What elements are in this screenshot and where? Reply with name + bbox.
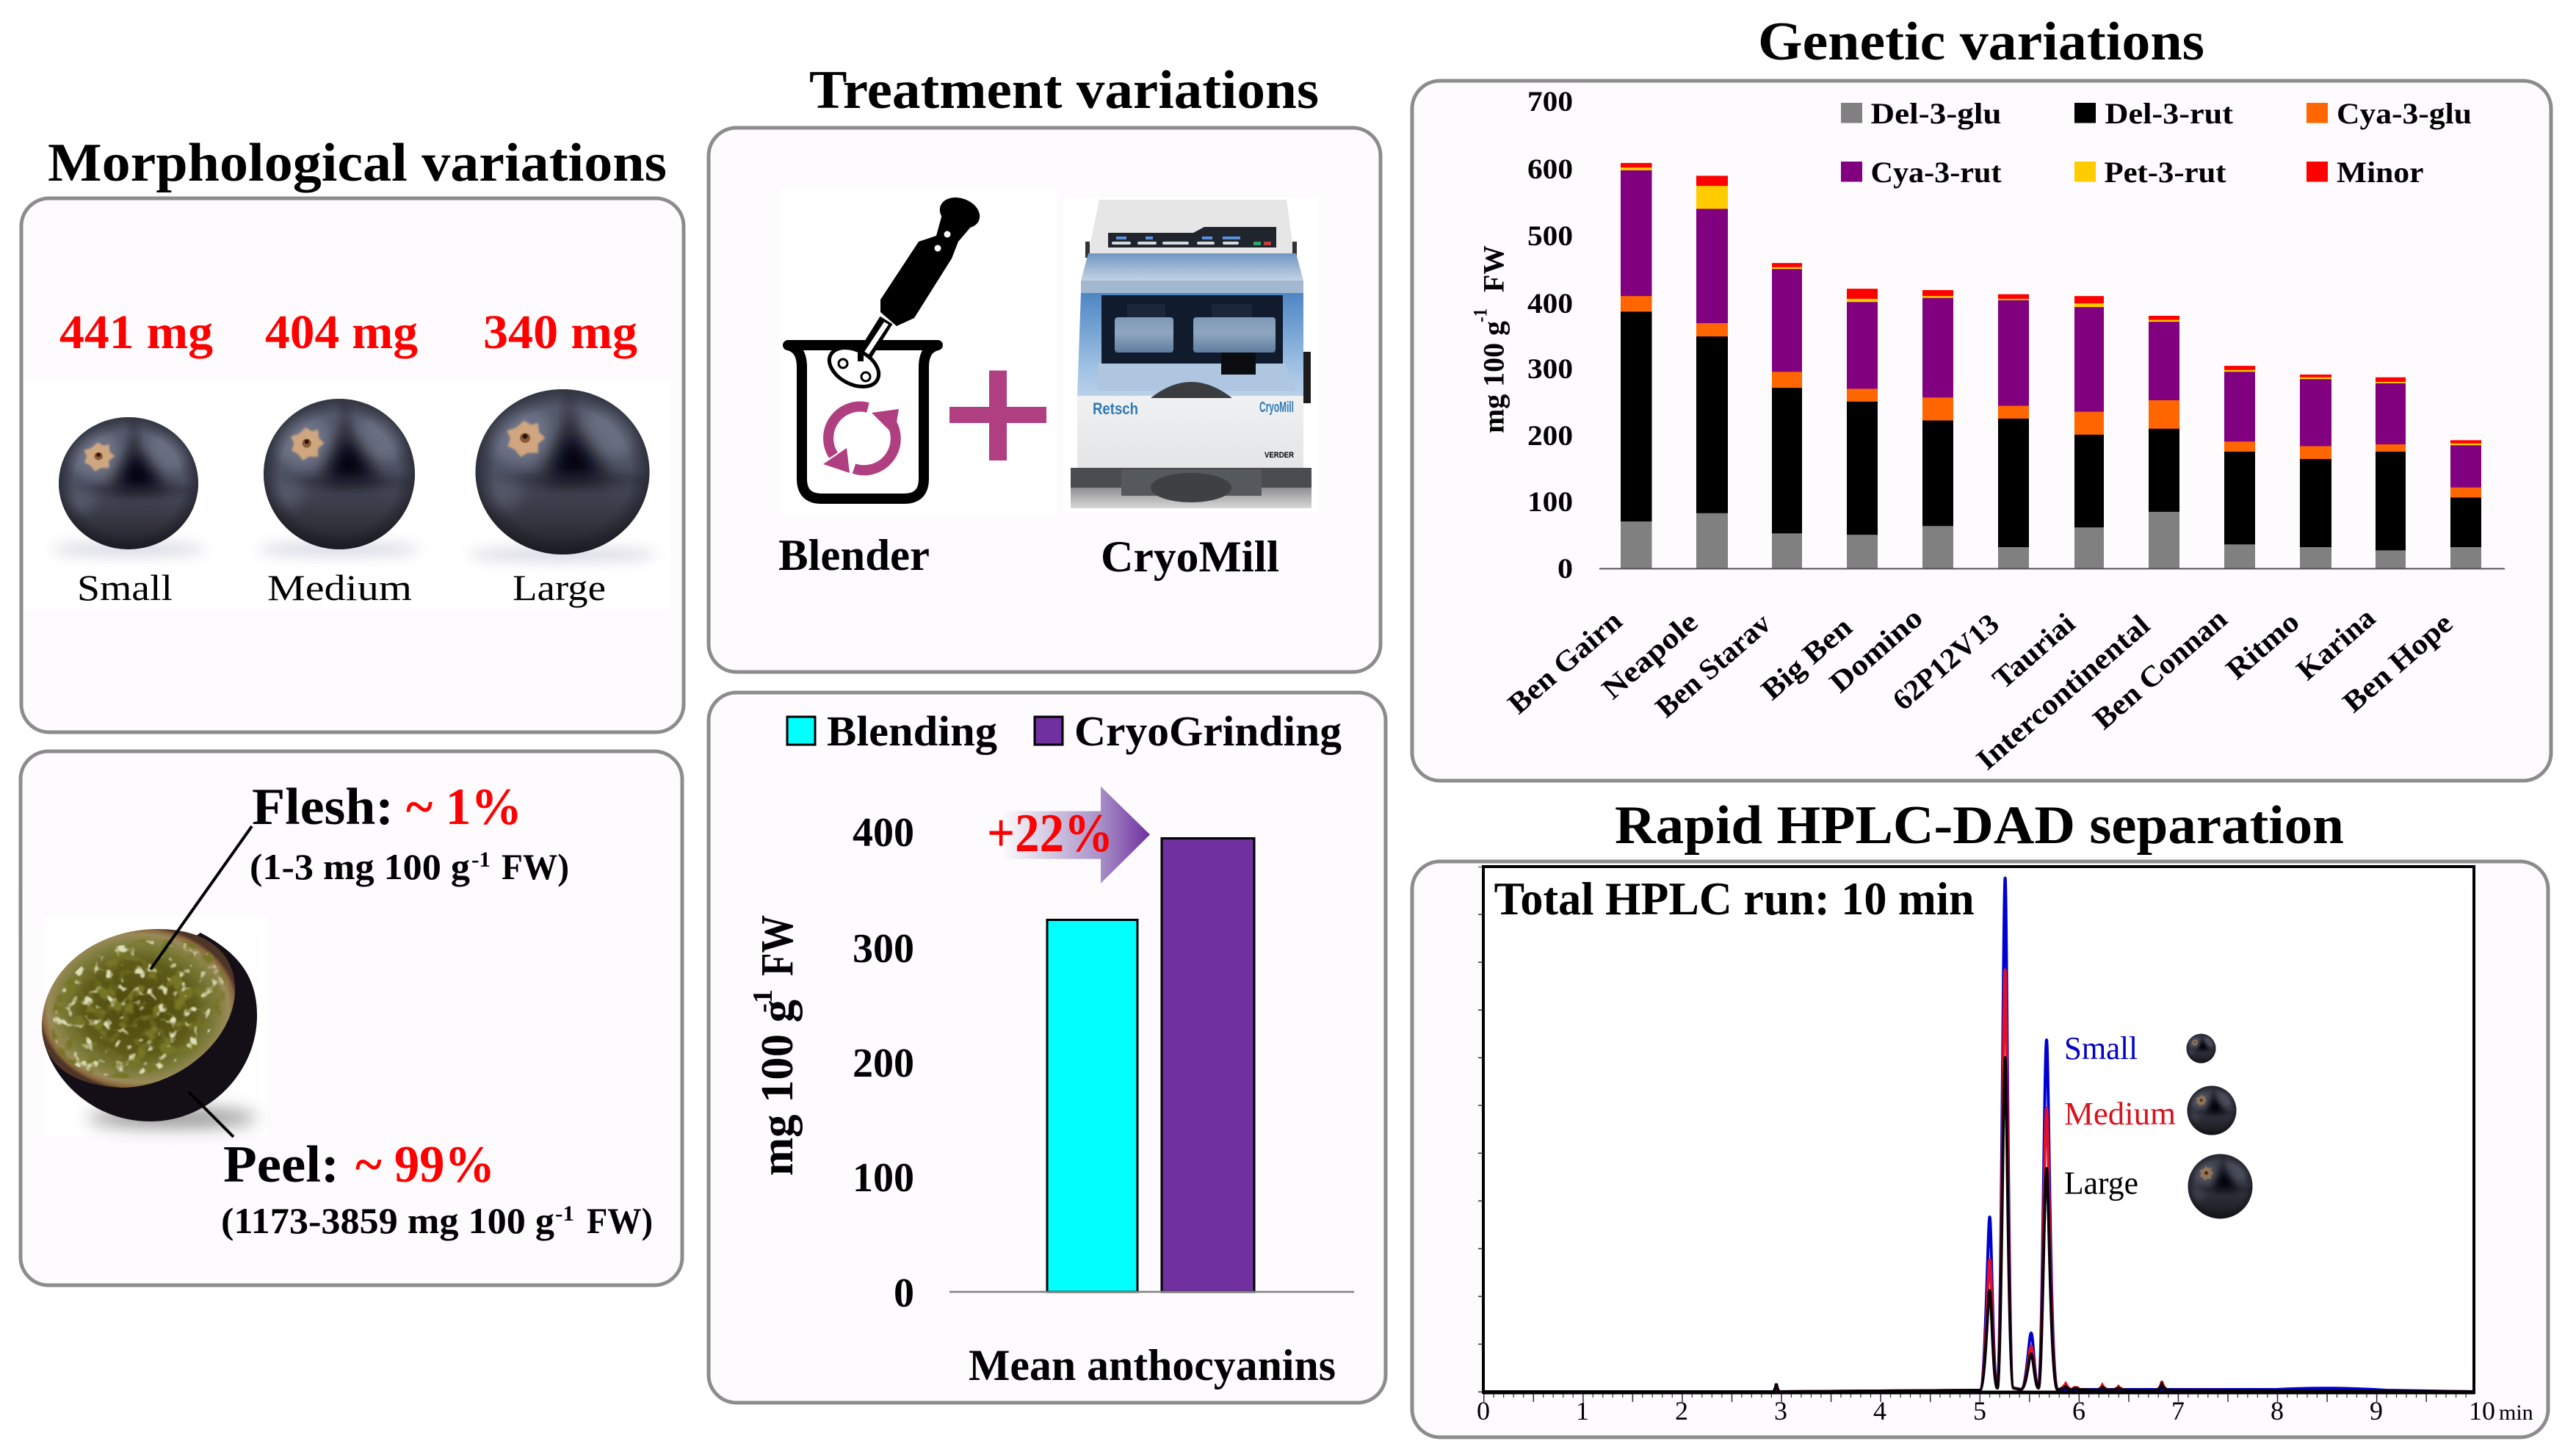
x axis labels [1501,601,2459,776]
icon: halved berry [42,929,257,1127]
x axis labels: 8 [2271,1396,2284,1425]
x axis label: Mean anthocyanins [969,1341,1336,1390]
text: flesh range: FW) [502,846,569,887]
x axis labels: 3 [1774,1396,1787,1425]
icon: small berry [59,417,198,549]
icon: medium berry [264,399,415,549]
label: Verder mark: VERDER [1265,451,1294,460]
heading: genetic variations: Genetic variations [1758,12,2204,72]
y axis title [1470,245,1510,433]
line: flesh pointer [151,826,252,969]
y axis labels: 400 [853,810,914,856]
text: peel range: FW) [587,1200,653,1241]
bar: Domino [1922,290,1953,568]
plot baseline [1483,1391,2475,1394]
x axis labels: 2 [1675,1396,1688,1425]
x axis labels: min [2499,1401,2533,1425]
text: flesh range [250,846,569,887]
label: blender: Blender [778,531,930,579]
legend [1841,97,2472,189]
label: flesh: Flesh: [252,778,394,836]
bar: blending [1047,919,1137,1292]
bar: cryogrinding [1162,839,1254,1292]
bar: Ben Hope [2450,440,2481,568]
icon: blender in beaker [788,192,984,499]
bar: Tauriai [2074,296,2104,568]
panel: berry size [21,198,684,732]
label: small: Small [77,567,173,608]
legend: blending: Blending [827,707,997,755]
legend: small [2064,1030,2216,1066]
plot frame [1483,867,2474,1392]
heading: treatment variations: Treatment variations [809,60,1319,120]
label: peel: Peel: [223,1136,339,1193]
value: +22%: +22% [987,803,1113,864]
panel: mean anthocyanins chart [709,693,1386,1403]
panel: treatment equipment [709,128,1381,672]
y axis labels: 500 [1527,220,1573,252]
y axis labels: 200 [1527,420,1573,452]
x axis labels: Domino [1823,601,1929,699]
x axis labels: Ben Gairn [1501,604,1628,720]
icon: CryoMill machine [1071,200,1311,508]
bar: Ritmo [2300,375,2331,568]
label: CryoMill brand: CryoMill [1259,400,1294,416]
stacked bars [1621,163,2481,568]
icon: plus sign [949,370,1046,460]
value: large berry 340 mg: 340 mg [483,306,637,359]
berry shadows [51,543,656,561]
bar: Karina [2376,377,2406,568]
x axis labels: Big Ben [1754,610,1859,707]
text: flesh range: -1 [471,848,491,872]
panel: cultivar chart [1412,81,2551,781]
label: Retsch brand: Retsch [1093,400,1138,418]
y axis labels [853,810,914,1316]
y axis labels: 0 [1557,553,1573,585]
x axis labels: 5 [1973,1396,1986,1425]
x axis [949,1291,1354,1293]
panel: flesh and peel [21,751,682,1285]
y axis labels: 100 [1527,486,1573,518]
x axis labels: Ritmo [2219,605,2305,686]
text: flesh range: (1-3 mg 100 g [250,846,470,887]
text: peel range: (1173-3859 mg 100 g [221,1200,554,1241]
y axis title: FW [1477,245,1510,292]
x axis labels: 10 [2469,1396,2495,1425]
label: cryomill: CryoMill [1101,532,1279,581]
y axis labels: 200 [853,1041,914,1086]
heading: morphological variations: Morphological variations [48,133,667,193]
label: medium: Medium [267,567,412,608]
legend: large [2064,1154,2253,1218]
label: large: Large [513,567,606,608]
legend: Del-3-rut [2105,97,2234,130]
legend: Cya-3-rut [1871,156,2002,189]
x axis labels [1477,1396,2533,1425]
x axis labels: Karina [2290,601,2381,687]
x axis labels: Neapole [1595,605,1704,706]
trace: large berries [1483,1058,2475,1392]
x axis labels: Ben Hope [2336,606,2459,719]
x axis labels: Tauriai [1986,607,2081,695]
bar: Big Ben [1847,289,1878,568]
y axis labels: 300 [1527,353,1573,385]
y axis title: -1 [1470,308,1491,322]
bar: Ben Connan [2224,366,2255,568]
y axis labels: 600 [1527,153,1573,185]
x axis labels: 1 [1576,1396,1589,1425]
bar: Ben Starav [1772,263,1802,568]
line: peel pointer [189,1092,234,1137]
arrow: increase [999,787,1150,884]
value: peel percent: ~ 99% [355,1136,495,1193]
legend: Minor [2337,156,2423,189]
x axis labels: Ben Connan [2086,602,2233,736]
y axis title: -1 [748,989,778,1013]
text: peel range: -1 [555,1202,574,1226]
trace: small berries [1483,878,2475,1392]
x axis labels: 4 [1873,1396,1886,1425]
y axis labels [1527,86,1573,585]
value: medium berry 404 mg: 404 mg [265,306,418,359]
y axis labels: 0 [894,1271,914,1316]
y axis labels: 700 [1527,86,1573,118]
legend: small: Small [2064,1030,2138,1066]
panel: HPLC chromatogram [1412,861,2548,1437]
legend: cryogrinding: CryoGrinding [1074,707,1342,755]
y axis labels: 400 [1527,288,1573,319]
x axis labels: 6 [2072,1396,2085,1425]
trace: medium berries [1483,969,2475,1392]
bar: Ben Gairn [1621,163,1652,568]
heading: rapid HPLC-DAD separation: Rapid HPLC-DAD separation [1615,795,2344,856]
x axis labels: 9 [2370,1396,2383,1425]
value: small berry 441 mg: 441 mg [59,306,213,359]
legend: medium: Medium [2064,1096,2176,1132]
x axis labels: 7 [2171,1396,2185,1425]
y axis labels: 300 [853,926,914,972]
y axis title: FW [753,915,803,976]
y axis title: mg 100 g [753,1000,803,1176]
legend: large: Large [2064,1166,2138,1202]
icon: rotation arrows [823,407,899,473]
x axis labels: 62P12V13 [1886,607,2005,717]
x axis labels: 0 [1477,1396,1490,1425]
value: flesh percent: ~ 1% [406,778,522,836]
y axis title [748,915,803,1176]
x axis labels: Intercontinental [1969,608,2156,776]
legend: medium [2064,1085,2237,1135]
x axis labels: Ben Starav [1649,607,1777,724]
legend: Cya-3-glu [2337,97,2472,130]
axis ticks [1480,867,2475,1398]
bar: Intercontinental [2149,316,2179,568]
callout: total run time: Total HPLC run: 10 min [1494,872,1975,925]
x axis [1599,568,2505,569]
y axis labels: 100 [853,1155,914,1201]
legend: Pet-3-rut [2105,156,2226,189]
legend: Del-3-glu [1871,97,2002,130]
bar: Neapole [1696,176,1728,568]
bar: 62P12V13 [1998,295,2029,568]
y axis title: mg 100 g [1477,321,1510,433]
icon: large berry [476,389,649,554]
